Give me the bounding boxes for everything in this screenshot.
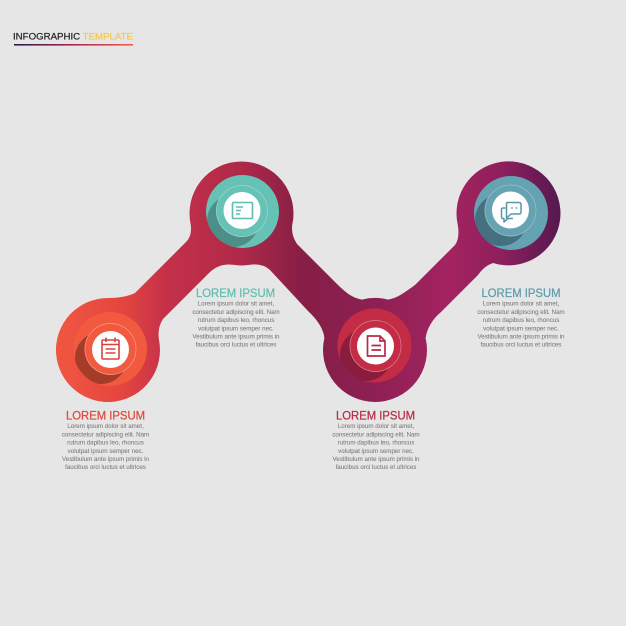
text block: step 1: faucibus orci luctus et ultrices — [65, 464, 146, 471]
infographic canvas — [14, 32, 564, 469]
text block: step 1: Lorem ipsum dolor sit amet, — [67, 423, 144, 430]
icon: calendar — [102, 338, 119, 359]
text block: step 1: rutrum dapibus leo, rhoncus — [67, 440, 144, 447]
text block: step 4: rutrum dapibus leo, rhoncus — [483, 317, 559, 324]
icon: chat bubbles — [502, 202, 521, 222]
text block: step 2: faucibus orci luctus et ultrices — [196, 342, 276, 349]
text block: step 3: faucibus orci luctus et ultrices — [336, 464, 416, 471]
text block: step 2: volutpat ipsum semper nec. — [198, 325, 274, 332]
text block: step 1: Vestibulum ante ipsum primis in — [62, 456, 150, 463]
connected ribbon with four circles — [56, 161, 560, 402]
text block: step 2 — [192, 286, 280, 349]
step 4 node — [474, 176, 548, 250]
text block: step 4: Lorem ipsum dolor sit amet, — [483, 301, 559, 308]
text block: step 3 — [332, 408, 420, 471]
text block: step 2: consectetur adipiscing elit. Nam — [192, 309, 280, 316]
text block: step 2: LOREM IPSUM — [196, 286, 275, 300]
icon: window card — [232, 202, 252, 218]
title: INFOGRAPHIC TEMPLATE — [13, 32, 133, 42]
step 3 node — [338, 308, 412, 382]
text block: step 1 — [62, 408, 150, 471]
text block: step 4: volutpat ipsum semper nec. — [483, 325, 559, 332]
text block: step 3: Vestibulum ante ipsum primis in — [332, 456, 420, 463]
step 1 node — [73, 312, 147, 386]
text block: step 2: Lorem ipsum dolor sit amet, — [198, 301, 274, 308]
text block: step 2: rutrum dapibus leo, rhoncus — [198, 317, 274, 324]
text block: step 4: LOREM IPSUM — [482, 286, 560, 300]
text block: step 3: Lorem ipsum dolor sit amet, — [338, 423, 414, 430]
text block: step 4: faucibus orci luctus et ultrices — [481, 342, 561, 349]
text block: step 3: LOREM IPSUM — [336, 408, 415, 422]
text block: step 4 — [477, 286, 565, 349]
text block: step 4: Vestibulum ante ipsum primis in — [477, 334, 565, 340]
text block: step 4: consectetur adipiscing elit. Nam — [477, 309, 565, 316]
text block: step 3: rutrum dapibus leo, rhoncus — [338, 440, 414, 447]
text block: step 1: volutpat ipsum semper nec. — [68, 448, 144, 455]
text block: step 3: volutpat ipsum semper nec. — [338, 448, 414, 455]
text block: step 1: consectetur adipiscing elit. Nam — [62, 431, 149, 438]
text block: step 1: LOREM IPSUM — [66, 408, 145, 422]
icon: document — [368, 336, 385, 356]
text block: step 3: consectetur adipiscing elit. Nam — [332, 431, 420, 438]
step 2 node — [206, 175, 279, 248]
text block: step 2: Vestibulum ante ipsum primis in — [192, 334, 280, 340]
